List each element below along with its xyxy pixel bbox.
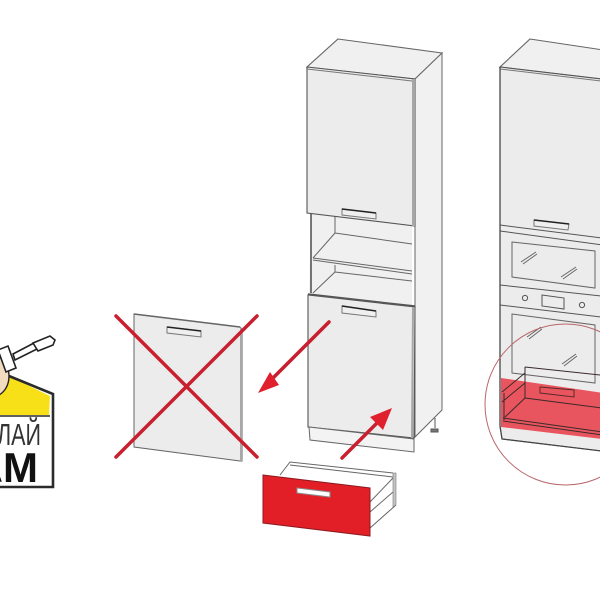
arrow: drawer inserted	[342, 408, 392, 458]
upper door	[307, 67, 415, 226]
control panel	[522, 295, 585, 309]
drawer handle	[297, 488, 330, 497]
upper door handle	[342, 209, 376, 219]
lower door handle	[342, 306, 376, 317]
upper door handle	[534, 220, 569, 230]
lower door	[308, 295, 415, 438]
logo: SDELAI SAM house	[0, 336, 55, 491]
drawer handle	[540, 387, 574, 397]
highlighted red drawer	[501, 367, 600, 440]
microwave window	[512, 242, 595, 288]
arrow: door removed	[258, 322, 329, 393]
red cross	[116, 316, 257, 457]
plinth and leg	[309, 427, 414, 452]
door handle	[167, 327, 201, 337]
oven window	[512, 314, 595, 383]
cabinet with built-in oven and microwave	[500, 39, 600, 452]
red drawer	[263, 461, 396, 536]
highlight circle	[485, 324, 600, 485]
crossed-out door panel	[116, 314, 257, 461]
cabinet with door and niche	[307, 39, 442, 452]
